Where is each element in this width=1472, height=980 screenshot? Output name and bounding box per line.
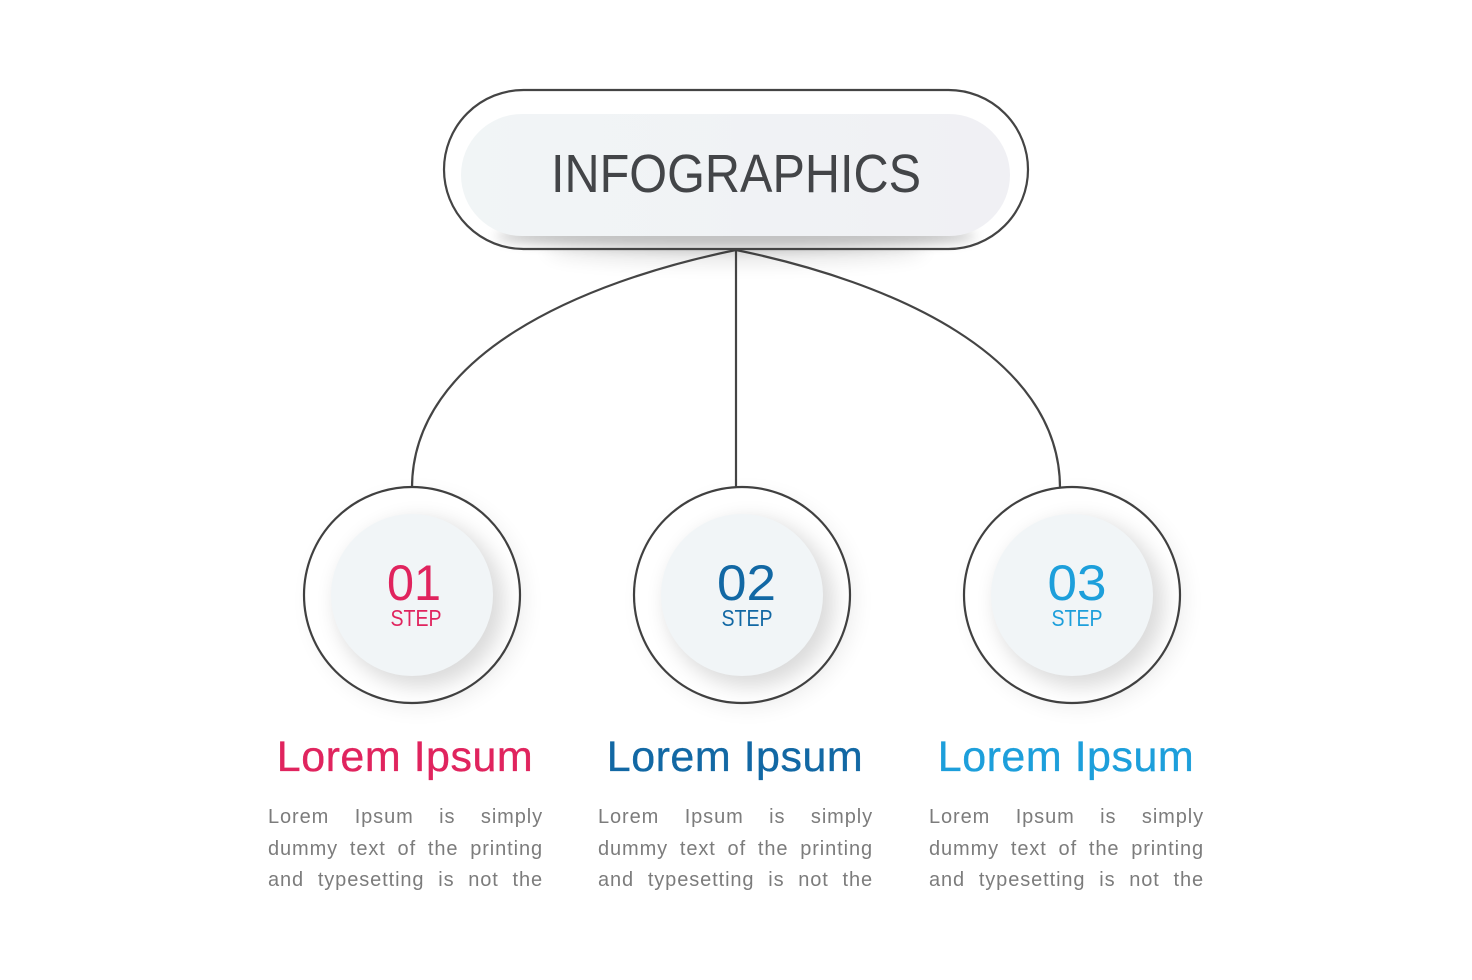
text block 2 xyxy=(598,806,873,891)
step 1 badge: STEP xyxy=(390,605,442,631)
text block 3: and typesetting is not the xyxy=(929,869,1204,891)
step 2 badge xyxy=(634,487,856,709)
step 3 badge xyxy=(964,487,1186,709)
text block 2: Lorem Ipsum is simply xyxy=(598,806,873,828)
text block 1: dummy text of the printing xyxy=(268,838,543,860)
heading 3: Lorem Ipsum xyxy=(938,733,1194,781)
title pill xyxy=(444,90,1028,249)
text block 3: dummy text of the printing xyxy=(929,838,1204,860)
text block 1: Lorem Ipsum is simply xyxy=(268,806,543,828)
step 3 badge: STEP xyxy=(1052,605,1102,631)
step 1 badge: 01 xyxy=(387,555,441,611)
step 3 badge: 03 xyxy=(1048,555,1106,611)
connector lines xyxy=(412,250,1060,488)
heading 1: Lorem Ipsum xyxy=(277,733,533,781)
text block 3 xyxy=(929,806,1204,891)
text block 3: Lorem Ipsum is simply xyxy=(929,806,1204,828)
text block 1: and typesetting is not the xyxy=(268,869,543,891)
text block 2: and typesetting is not the xyxy=(598,869,873,891)
heading 2: Lorem Ipsum xyxy=(607,733,863,781)
step 2 badge: STEP xyxy=(722,605,772,631)
shadow under title pill xyxy=(546,236,926,264)
text block 2: dummy text of the printing xyxy=(598,838,873,860)
text block 1 xyxy=(268,806,543,891)
title text: INFOGRAPHICS xyxy=(551,144,921,204)
step 2 badge: 02 xyxy=(717,555,776,611)
step 1 badge xyxy=(304,487,526,709)
